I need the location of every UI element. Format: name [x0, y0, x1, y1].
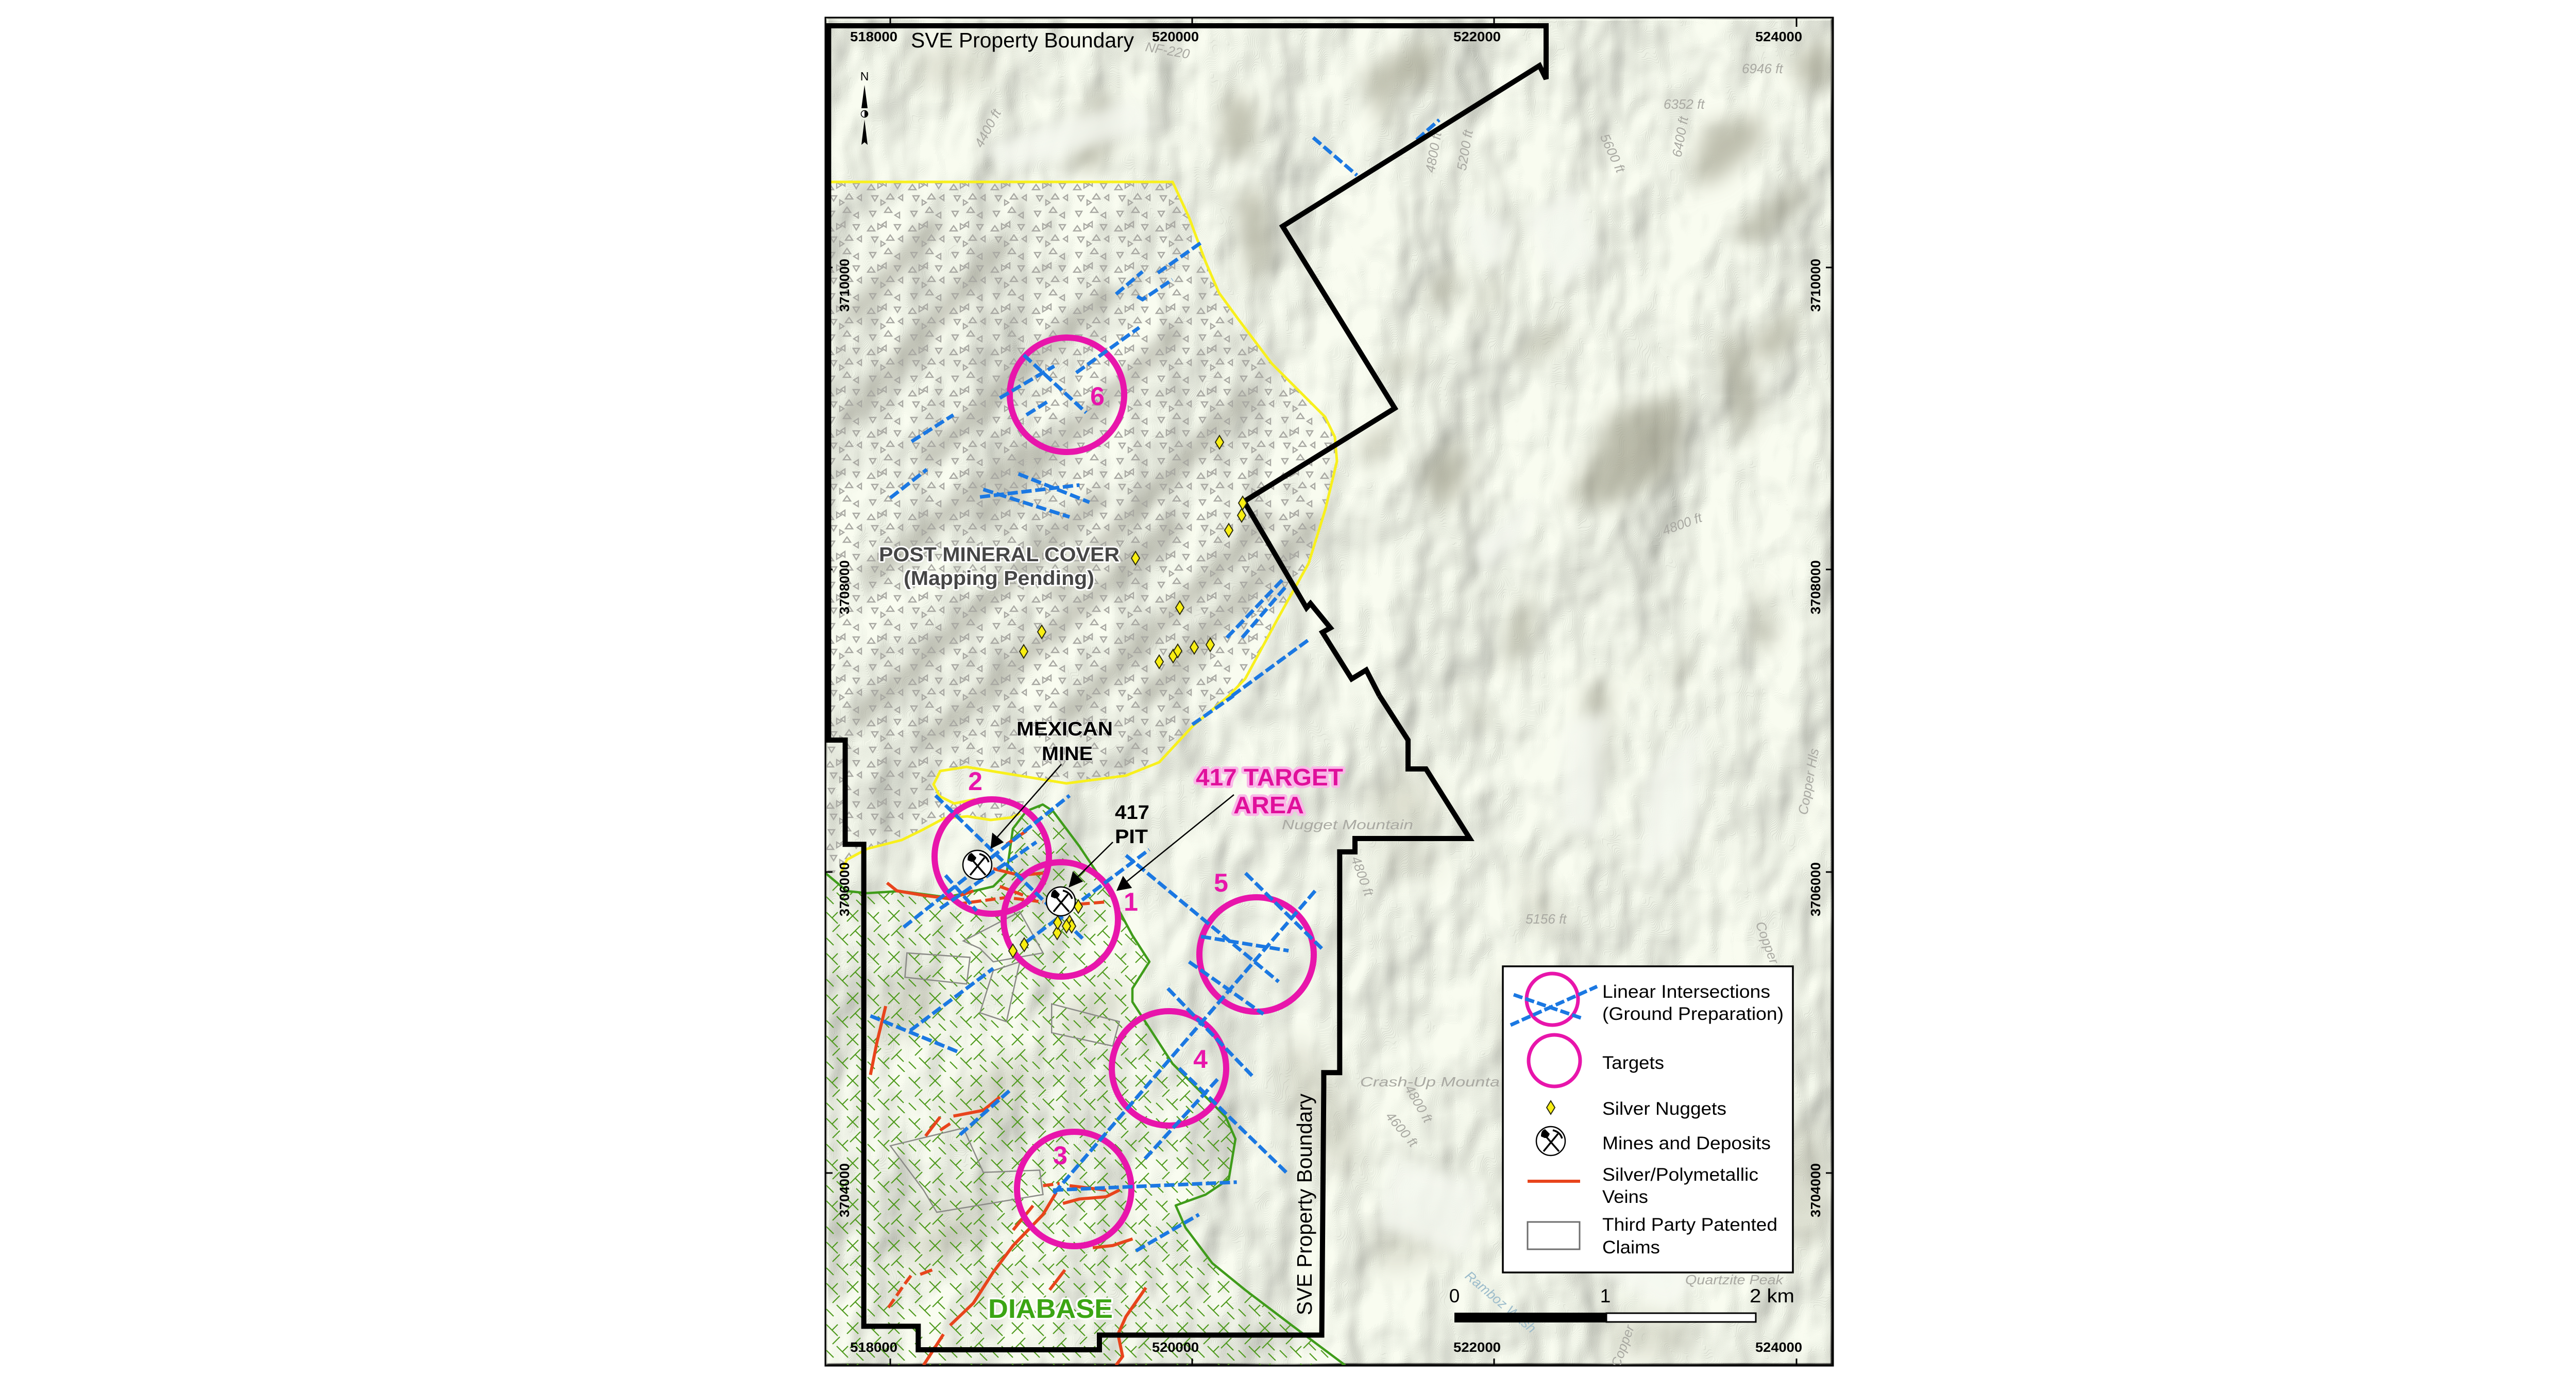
scale bar: 0 [1449, 1285, 1460, 1306]
top and bottom easting coordinates: 522000 [1453, 29, 1501, 44]
top and bottom easting coordinates: 520000 [1152, 29, 1199, 44]
legend item: targets [1529, 1035, 1664, 1086]
label: 417 pit: PIT [1115, 826, 1148, 848]
legend item: targets: Targets [1602, 1053, 1664, 1073]
scale bar: 2 km [1750, 1285, 1794, 1306]
faint base map labels: 4800 ft [1402, 1082, 1436, 1126]
map figure [824, 16, 1834, 1367]
label: 417 target area: AREA [1233, 792, 1304, 818]
faint base map labels: Crash-Up Mounta [1360, 1074, 1500, 1090]
legend item: veins: Silver/Polymetallic [1602, 1165, 1758, 1185]
label: 417 pit: 417 [1115, 802, 1149, 824]
faint base map labels: Copper [1753, 919, 1783, 966]
top and bottom easting coordinates: 522000 [1453, 1339, 1501, 1355]
target number labels: 1 [1124, 887, 1138, 916]
top and bottom easting coordinates [850, 29, 1802, 1355]
silver nuggets [1009, 435, 1247, 958]
label: SVE property boundary vertical: SVE Property Boundary [1293, 1094, 1316, 1315]
label: 417 target area [1196, 764, 1343, 818]
label: 417 target area: 417 TARGET [1196, 764, 1343, 791]
legend item: mines and deposits: Mines and Deposits [1602, 1133, 1771, 1153]
north arrow: N [860, 70, 869, 83]
target number labels: 2 [968, 767, 982, 796]
faint base map labels: 6352 ft [1664, 96, 1705, 112]
topographic map body [825, 18, 1833, 1369]
silver polymetallic veins [871, 831, 1146, 1365]
legend panel [1503, 966, 1793, 1272]
legend item: patented claims: Claims [1602, 1237, 1660, 1258]
diabase area [825, 805, 1345, 1366]
faint base map labels: NF-220 [1144, 39, 1191, 62]
label: post mineral cover: POST MINERAL COVER [879, 544, 1120, 566]
diabase contact line [825, 805, 1345, 1365]
top and bottom easting coordinates: 520000 [1152, 1339, 1199, 1355]
legend item: patented claims [1528, 1215, 1777, 1258]
faint base map labels: 4800 ft [1348, 854, 1377, 899]
top and bottom easting coordinates: 524000 [1755, 1339, 1802, 1355]
faint base map labels: 4800 ft [1660, 509, 1705, 538]
third party patented claims [890, 912, 1120, 1212]
left and right northing coordinates: 3704000 [1808, 1163, 1823, 1217]
SVE property boundary line [828, 26, 1546, 1350]
target circles [935, 338, 1314, 1246]
legend item: silver nuggets [1547, 1099, 1726, 1119]
left and right northing coordinates: 3710000 [837, 259, 852, 312]
faint base map labels: 4600 ft [1383, 1109, 1421, 1151]
legend item: veins [1528, 1165, 1758, 1207]
left and right northing coordinates: 3706000 [837, 862, 852, 916]
legend item: linear intersections: (Ground Preparation) [1602, 1004, 1784, 1024]
target number labels [968, 382, 1228, 1170]
label: diabase: DIABASE [988, 1294, 1113, 1324]
leader arrows [991, 764, 1234, 890]
label: post mineral cover: (Mapping Pending) [904, 567, 1094, 590]
cover boundary line [825, 182, 1337, 873]
map frame [825, 18, 1833, 1366]
faint base map labels: 5200 ft [1453, 128, 1476, 172]
legend item: linear intersections: Linear Intersections [1602, 982, 1770, 1002]
label: 417 pit [1115, 802, 1149, 848]
top and bottom easting coordinates: 524000 [1755, 29, 1802, 44]
target number labels: 6 [1090, 382, 1105, 411]
legend item: linear intersections [1511, 974, 1784, 1025]
linear intersections north group [890, 120, 1439, 696]
left and right northing coordinates: 3706000 [1808, 862, 1823, 916]
left and right northing coordinates: 3710000 [1808, 259, 1823, 312]
north arrow [860, 70, 869, 145]
legend item: veins: Veins [1602, 1187, 1648, 1207]
left and right northing coordinates: 3704000 [837, 1163, 852, 1217]
post mineral cover area [825, 182, 1337, 873]
hillshade terrain [825, 18, 1833, 1366]
faint base map labels: Nugget Mountain [1282, 817, 1413, 832]
mine symbols [963, 850, 1075, 916]
faint base map labels: 6946 ft [1742, 61, 1784, 76]
top and bottom easting coordinates: 518000 [850, 1339, 897, 1355]
legend item: mines and deposits [1536, 1127, 1771, 1155]
label: SVE property boundary top: SVE Property Boundary [911, 28, 1134, 52]
top and bottom easting coordinates: 518000 [850, 29, 897, 44]
faint base map labels: 4400 ft [971, 106, 1005, 150]
faint base map labels: Copper [1608, 1322, 1638, 1369]
faint base map labels: Quartzite Peak [1685, 1272, 1784, 1287]
faint base map labels: 5600 ft [1597, 131, 1629, 176]
left and right northing coordinates: 3708000 [1808, 560, 1823, 614]
faint base map labels: 5156 ft [1526, 911, 1567, 927]
label: Mexican mine: MEXICAN [1016, 718, 1113, 740]
faint base map labels: Ramboz Wash [1462, 1268, 1539, 1336]
left and right northing coordinates [837, 259, 1823, 1217]
target number labels: 4 [1193, 1045, 1208, 1074]
scale bar: 1 [1600, 1285, 1611, 1306]
label: post mineral cover [879, 544, 1120, 590]
label: Mexican mine: MINE [1042, 743, 1093, 765]
linear intersections south group [871, 696, 1322, 1251]
left and right northing coordinates: 3708000 [837, 560, 852, 614]
target number labels: 5 [1214, 868, 1228, 897]
legend item: patented claims: Third Party Patented [1602, 1215, 1777, 1235]
label: Mexican mine [1016, 718, 1113, 765]
scale bar [1449, 1285, 1794, 1322]
faint base map labels [971, 39, 1822, 1369]
faint base map labels: 6400 ft [1669, 114, 1691, 158]
faint base map labels: 4800 ft [1422, 130, 1445, 174]
target number labels: 3 [1053, 1141, 1067, 1170]
faint base map labels: Copper Hls [1795, 747, 1822, 816]
legend item: silver nuggets: Silver Nuggets [1602, 1099, 1726, 1119]
